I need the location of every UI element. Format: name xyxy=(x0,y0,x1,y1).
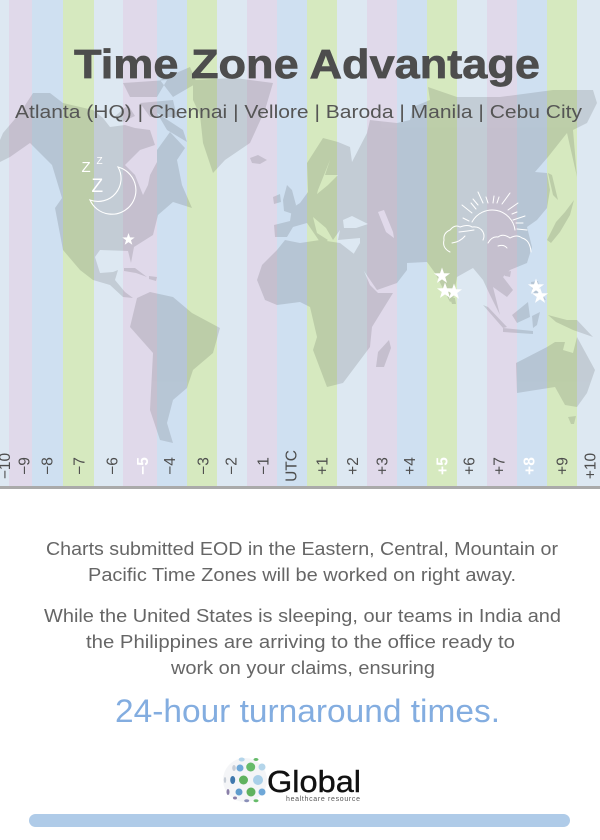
icon: sleeping moon: Z xyxy=(82,159,91,176)
time zone labels: +1 xyxy=(314,457,332,475)
stars: India xyxy=(434,268,462,299)
paragraph: charts submitted: Pacific Time Zones will be worked on right away. xyxy=(88,564,516,585)
office locations: Atlanta (HQ) | Chennai | Vellore | Baroda | Manila | Cebu City xyxy=(15,101,583,122)
icon: sleeping moon: Z xyxy=(92,176,104,197)
time zone stripes xyxy=(0,0,600,487)
time zone labels: −8 xyxy=(40,457,56,475)
time zone labels: +3 xyxy=(374,457,392,475)
paragraph: teams in India and the Philippines: the Philippines are arriving to the office ready to xyxy=(86,631,515,652)
time zone labels: +4 xyxy=(402,457,419,475)
paragraph: teams in India and the Philippines xyxy=(44,605,561,678)
callout: turnaround: 24-hour turnaround times. xyxy=(115,693,500,729)
paragraph: charts submitted: Charts submitted EOD in the Eastern, Central, Mountain or xyxy=(46,538,558,559)
paragraph: charts submitted xyxy=(46,538,558,585)
time zone labels: +8 xyxy=(522,457,538,475)
time zone labels: +5 xyxy=(434,457,452,475)
time zone labels: −1 xyxy=(256,457,272,475)
time zone labels: +6 xyxy=(462,457,478,475)
logo globe xyxy=(223,758,267,802)
star: Atlanta xyxy=(122,233,135,245)
time zone labels: −4 xyxy=(162,457,179,475)
logo: Global xyxy=(267,764,361,799)
icon: sleeping moon xyxy=(82,156,136,214)
time zone labels: −7 xyxy=(72,457,88,475)
map baseline xyxy=(0,486,600,489)
icon: sleeping moon: Z xyxy=(96,156,103,167)
title: Time Zone Advantage xyxy=(74,41,540,87)
time zone labels: −2 xyxy=(224,457,240,475)
time zone labels xyxy=(0,450,600,482)
time zone labels: −6 xyxy=(104,457,122,475)
world map xyxy=(0,67,597,443)
time zone labels: +2 xyxy=(345,457,362,475)
time zone labels: −9 xyxy=(16,457,34,475)
paragraph: teams in India and the Philippines: work on your claims, ensuring xyxy=(170,657,435,678)
icon: rising sun with clouds xyxy=(444,192,531,252)
logo xyxy=(223,758,361,803)
time zone labels: +7 xyxy=(492,457,508,475)
time zone labels: −3 xyxy=(196,457,212,475)
time zone labels: UTC xyxy=(284,450,300,482)
stars: Philippines xyxy=(528,278,548,303)
paragraph: teams in India and the Philippines: While the United States is sleeping, our teams in India and xyxy=(44,605,561,626)
footer bar xyxy=(29,814,570,827)
time zone labels: +10 xyxy=(582,452,600,479)
time zone labels: −5 xyxy=(135,457,152,475)
logo: healthcare resource xyxy=(286,796,360,803)
time zone labels: +9 xyxy=(554,457,572,475)
